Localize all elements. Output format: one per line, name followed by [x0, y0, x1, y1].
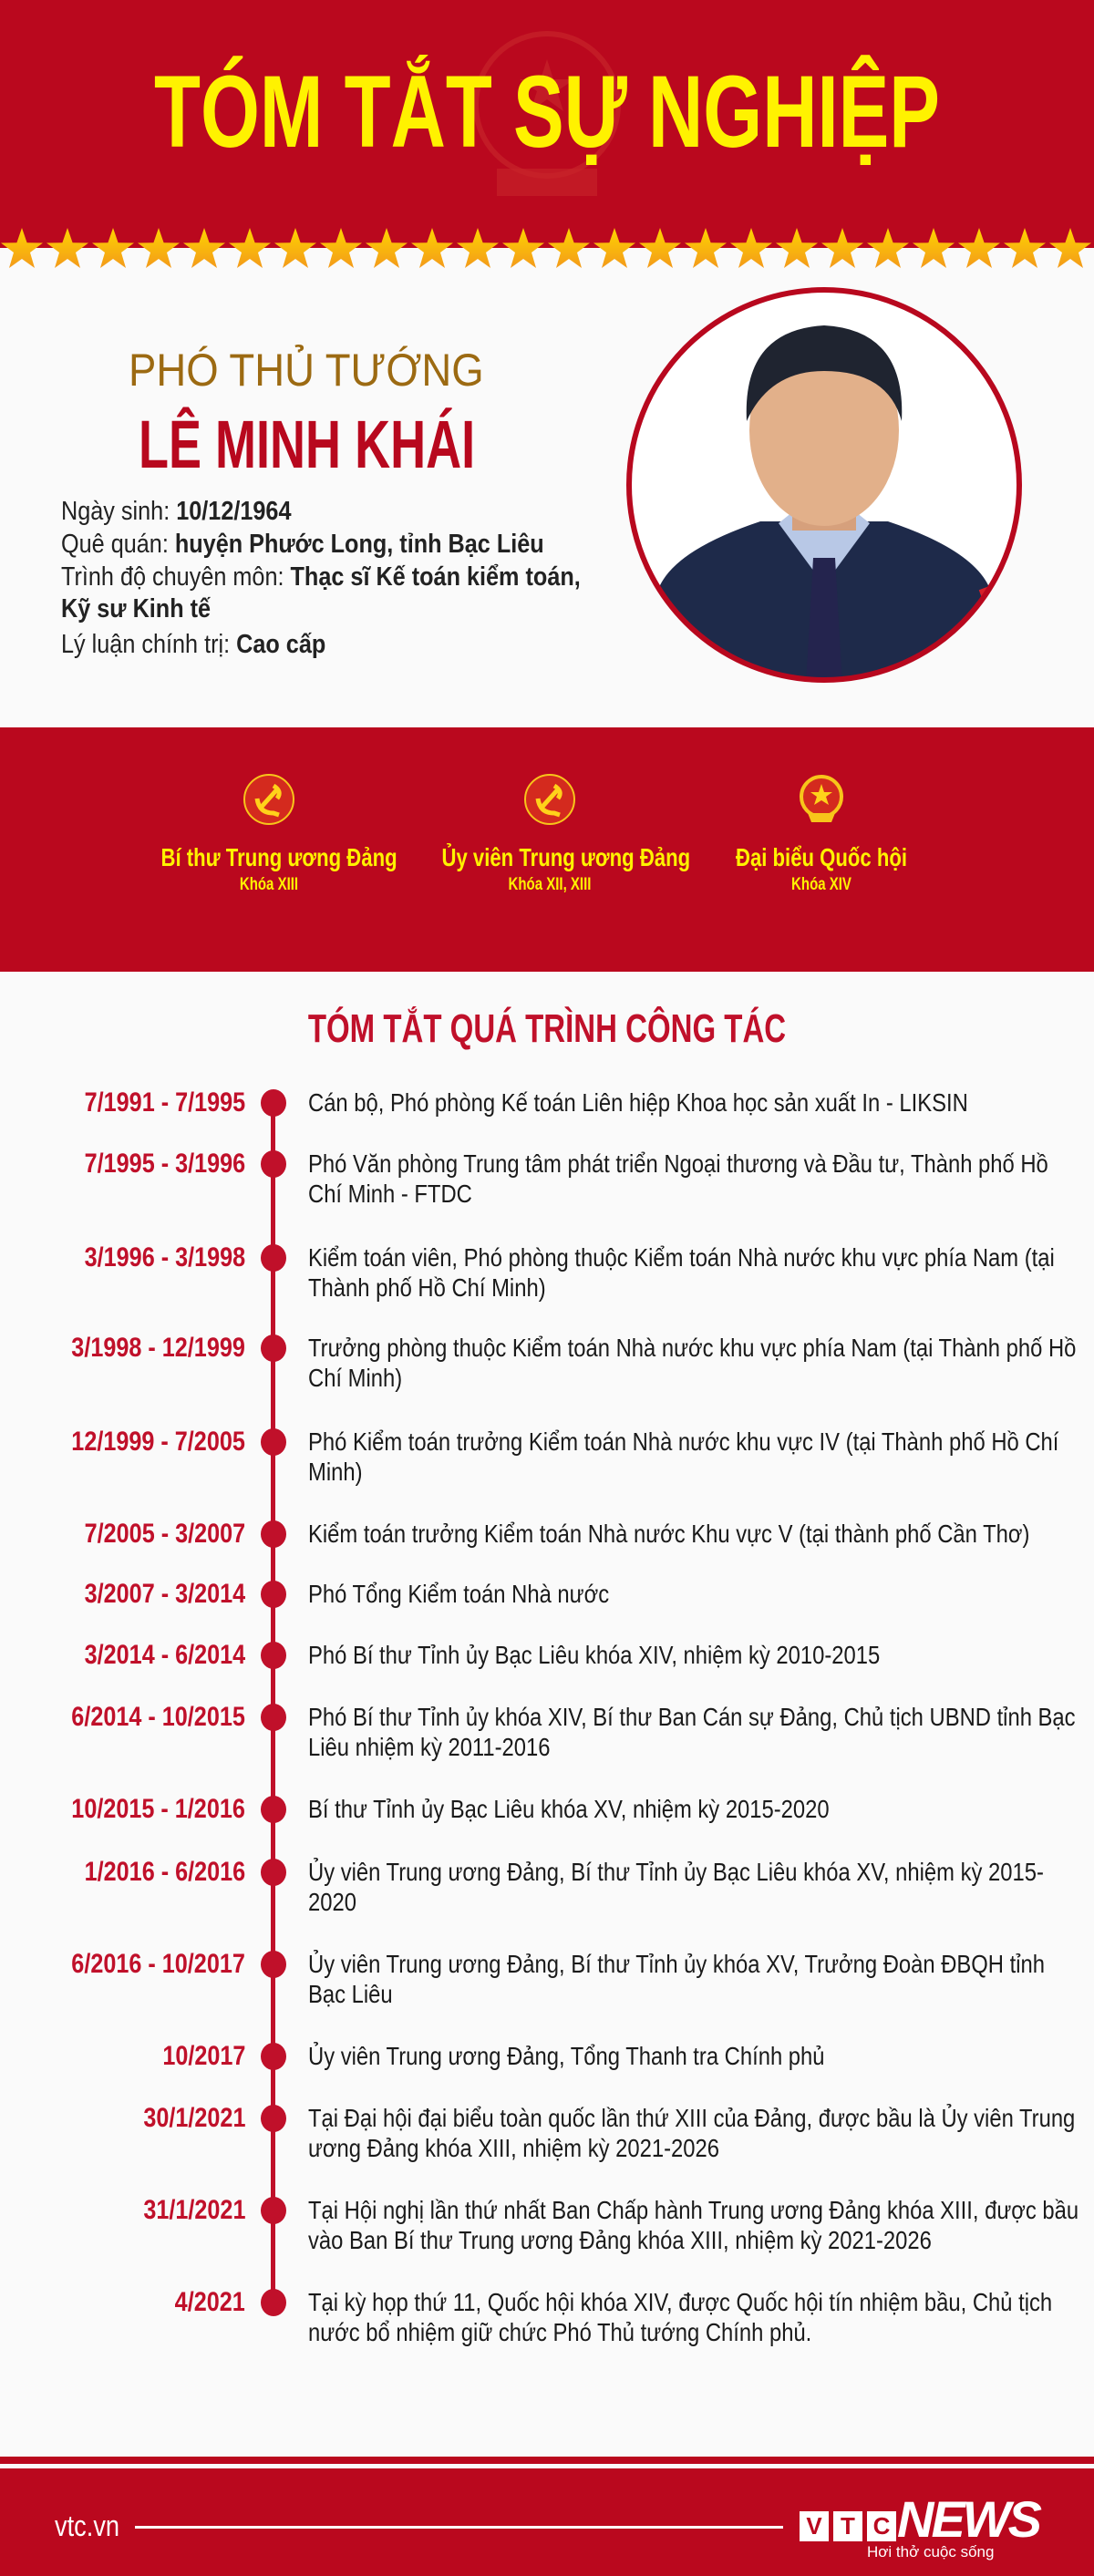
title: TÓM TẮT SỰ NGHIỆP: [154, 55, 940, 169]
item 3: [84, 1242, 1055, 1302]
item 15: vào Ban Bí thư Trung ương Đảng khóa XIII, nhiệm kỳ 2021-2026: [308, 2226, 932, 2254]
position: Ủy viên Trung ương Đảng: Ủy viên Trung ương Đảng: [441, 843, 690, 871]
icon: party emblem: [524, 774, 575, 825]
item 2: [84, 1149, 1048, 1208]
personal info: Ngày sinh: 10/12/1964: [61, 497, 292, 526]
item 11: Ủy viên Trung ương Đảng, Bí thư Tỉnh ủy Bạc Liêu khóa XV, nhiệm kỳ 2015-: [308, 1858, 1044, 1886]
item 8: [84, 1640, 880, 1670]
item 15: [143, 2195, 1079, 2254]
item 3: 3/1996 - 3/1998: [84, 1242, 245, 1273]
item 13: 10/2017: [162, 2041, 245, 2071]
position: Đại biểu Quốc hội: [736, 775, 907, 894]
name: LÊ MINH KHÁI: [139, 407, 475, 482]
header band: [0, 0, 1094, 248]
position: Bí thư Trung ương Đảng: [160, 774, 397, 894]
item 12: 6/2016 - 10/2017: [71, 1949, 245, 1979]
item 16: 4/2021: [175, 2287, 245, 2317]
logo: VTC News: NEWS: [897, 2490, 1039, 2548]
icon: national emblem: [800, 775, 843, 822]
item 11: [84, 1857, 1044, 1916]
item 2: 7/1995 - 3/1996: [84, 1149, 245, 1179]
item 6: Kiểm toán trưởng Kiểm toán Nhà nước Khu vực V (tại thành phố Cần Thơ): [308, 1520, 1029, 1548]
personal info: Quê quán: huyện Phước Long, tỉnh Bạc Liêu: [61, 530, 544, 559]
timeline: [71, 1087, 1079, 2346]
item 4: Chí Minh): [308, 1364, 402, 1392]
item 4: [71, 1333, 1076, 1392]
red positions band: [0, 727, 1094, 972]
item 5: Minh): [308, 1458, 363, 1486]
item 1: 7/1991 - 7/1995: [84, 1087, 245, 1118]
item 15: 31/1/2021: [143, 2195, 245, 2225]
item 1: Cán bộ, Phó phòng Kế toán Liên hiệp Khoa học sản xuất In - LIKSIN: [308, 1088, 968, 1117]
item 5: Phó Kiểm toán trưởng Kiểm toán Nhà nước khu vực IV (tại Thành phố Hồ Chí: [308, 1427, 1058, 1456]
item 12: [71, 1949, 1045, 2008]
logo: VTC News: Hơi thở cuộc sống: [867, 2543, 994, 2561]
portrait: [626, 287, 1022, 683]
logo: VTC News: C: [873, 2512, 890, 2540]
item 14: ương Đảng khóa XIII, nhiệm kỳ 2021-2026: [308, 2134, 719, 2162]
footer stripe: [0, 2457, 1094, 2464]
item 9: 6/2014 - 10/2015: [71, 1702, 245, 1732]
position: Bí thư Trung ương Đảng: Khóa XIII: [240, 875, 298, 894]
item 10: [71, 1794, 830, 1824]
personal info: Trình độ chuyên môn: Thạc sĩ Kế toán kiểm toán,: [61, 562, 581, 592]
item 10: 10/2015 - 1/2016: [71, 1794, 245, 1824]
logo: VTC News: V: [806, 2512, 822, 2540]
item 14: [143, 2103, 1075, 2162]
item 16: [175, 2287, 1052, 2346]
watermark emblem: [474, 31, 621, 196]
item 7: Phó Tổng Kiểm toán Nhà nước: [308, 1580, 609, 1608]
item 11: 2020: [308, 1888, 356, 1916]
position: Đại biểu Quốc hội: Khóa XIV: [791, 875, 851, 894]
item 3: Kiểm toán viên, Phó phòng thuộc Kiểm toán Nhà nước khu vực phía Nam (tại: [308, 1243, 1055, 1272]
position: Đại biểu Quốc hội: Đại biểu Quốc hội: [736, 843, 907, 871]
item 5: [71, 1427, 1059, 1486]
star border: [1, 228, 1091, 268]
footer: [0, 2468, 1094, 2576]
item 7: 3/2007 - 3/2014: [84, 1579, 245, 1609]
item 7: [84, 1579, 609, 1609]
item 10: Bí thư Tỉnh ủy Bạc Liêu khóa XV, nhiệm kỳ 2015-2020: [308, 1795, 830, 1823]
item 4: 3/1998 - 12/1999: [71, 1333, 245, 1363]
item 4: Trưởng phòng thuộc Kiểm toán Nhà nước khu vực phía Nam (tại Thành phố Hồ: [308, 1334, 1076, 1362]
footer url: vtc.vn: [55, 2509, 119, 2542]
logo: VTC News: [800, 2490, 1041, 2561]
item 9: [71, 1702, 1076, 1761]
item 14: Tại Đại hội đại biểu toàn quốc lần thứ XIII của Đảng, được bầu là Ủy viên Trung: [308, 2104, 1075, 2132]
position: Ủy viên Trung ương Đảng: Khóa XII, XIII: [509, 875, 591, 894]
item 3: Thành phố Hồ Chí Minh): [308, 1273, 546, 1302]
item 15: Tại Hội nghị lần thứ nhất Ban Chấp hành Trung ương Đảng khóa XIII, được bầu: [308, 2196, 1079, 2224]
subtitle: role: PHÓ THỦ TƯỚNG: [129, 345, 484, 396]
icon: party emblem: [243, 774, 294, 825]
item 6: 7/2005 - 3/2007: [84, 1519, 245, 1549]
item 14: 30/1/2021: [143, 2103, 245, 2133]
item 12: Bạc Liêu: [308, 1980, 393, 2008]
item 9: Liêu nhiệm kỳ 2011-2016: [308, 1733, 551, 1761]
logo: VTC News: T: [841, 2512, 855, 2540]
item 13: Ủy viên Trung ương Đảng, Tổng Thanh tra Chính phủ: [308, 2042, 825, 2070]
position: Ủy viên Trung ương Đảng: [441, 774, 690, 894]
personal info: [61, 497, 581, 659]
personal info: Lý luận chính trị: Cao cấp: [61, 630, 325, 659]
item 5: 12/1999 - 7/2005: [71, 1427, 245, 1457]
item 16: nước bổ nhiệm giữ chức Phó Thủ tướng Chính phủ.: [308, 2318, 811, 2346]
item 8: 3/2014 - 6/2014: [84, 1640, 245, 1670]
item 8: Phó Bí thư Tỉnh ủy Bạc Liêu khóa XIV, nhiệm kỳ 2010-2015: [308, 1641, 880, 1669]
section heading: TÓM TẮT QUÁ TRÌNH CÔNG TÁC: [308, 1006, 786, 1051]
item 12: Ủy viên Trung ương Đảng, Bí thư Tỉnh ủy khóa XV, Trưởng Đoàn ĐBQH tỉnh: [308, 1950, 1045, 1978]
personal info: Kỹ sư Kinh tế: [61, 594, 211, 623]
position: Bí thư Trung ương Đảng: Bí thư Trung ương Đảng: [160, 843, 397, 871]
item 9: Phó Bí thư Tỉnh ủy khóa XIV, Bí thư Ban Cán sự Đảng, Chủ tịch UBND tỉnh Bạc: [308, 1703, 1076, 1731]
item 11: 1/2016 - 6/2016: [84, 1857, 245, 1887]
item 2: Phó Văn phòng Trung tâm phát triển Ngoại thương và Đầu tư, Thành phố Hồ: [308, 1149, 1048, 1178]
item 2: Chí Minh - FTDC: [308, 1180, 472, 1208]
item 16: Tại kỳ họp thứ 11, Quốc hội khóa XIV, được Quốc hội tín nhiệm bầu, Chủ tịch: [308, 2288, 1052, 2316]
